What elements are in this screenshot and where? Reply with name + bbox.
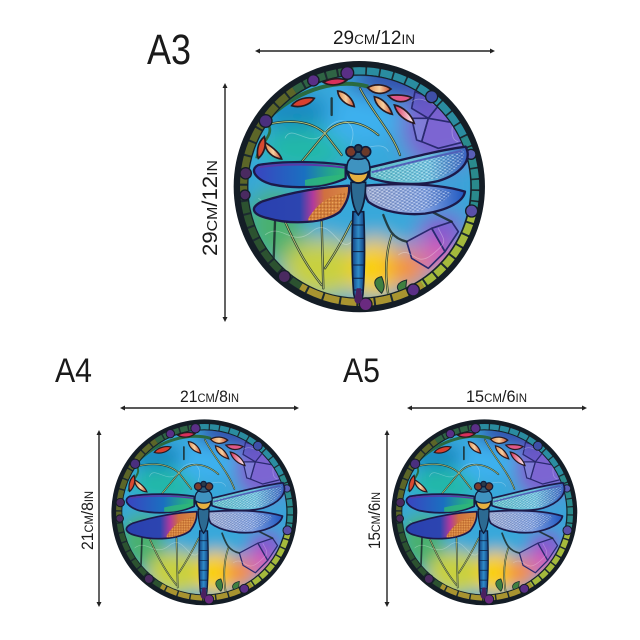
A3 dragonfly disc <box>234 61 485 312</box>
label: A4: A4 <box>55 352 92 390</box>
A3 height arrow <box>222 83 228 322</box>
A4 width label: 21CM/8IN <box>180 387 239 406</box>
A5 height label: 15CM/6IN <box>365 492 384 549</box>
A5 width arrow <box>407 406 587 410</box>
A4 height label: 21CM/8IN <box>78 491 97 550</box>
A4 dragonfly disc <box>111 419 297 605</box>
A4 height arrow <box>96 430 102 607</box>
A3 width label: 29CM/12IN <box>333 28 415 49</box>
A4 width arrow <box>120 406 299 410</box>
A3 width arrow <box>255 48 495 54</box>
A5 width label: 15CM/6IN <box>466 387 527 406</box>
label: A3: A3 <box>147 26 191 74</box>
A5 height arrow <box>384 430 390 607</box>
A5 dragonfly disc <box>391 419 577 605</box>
A3 height label: 29CM/12IN <box>199 160 222 256</box>
label: A5: A5 <box>343 352 380 390</box>
